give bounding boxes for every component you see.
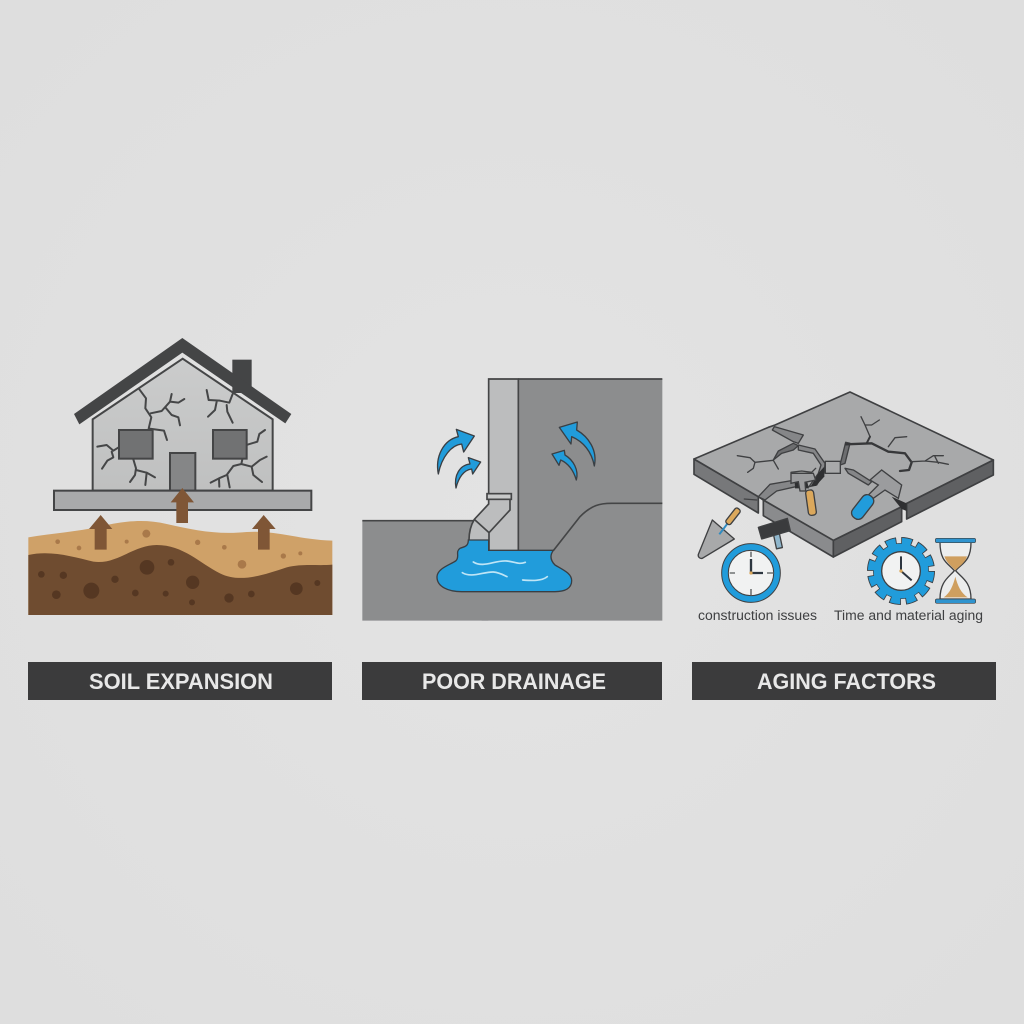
door <box>170 453 195 491</box>
panel: soil expansion <box>28 338 332 615</box>
slab side faces <box>694 459 758 513</box>
house wall <box>93 359 273 491</box>
icon: mallet <box>758 518 790 549</box>
banner: soil expansion <box>28 662 332 700</box>
soil stones <box>38 559 320 605</box>
center block <box>825 461 840 473</box>
window left <box>119 430 153 459</box>
foundation slab <box>54 491 311 510</box>
icon: hourglass <box>935 538 976 603</box>
water pool <box>437 540 572 592</box>
banner: aging factors <box>692 662 996 700</box>
icon: trowel <box>698 507 741 558</box>
slab top <box>694 392 993 540</box>
banner: poor drainage: POOR DRAINAGE <box>422 669 606 694</box>
roof <box>74 338 291 424</box>
curved arrows <box>438 422 595 488</box>
hairline cracks <box>737 417 948 500</box>
banner: poor drainage <box>362 662 662 700</box>
caption: time and material aging: Time and material aging <box>834 608 983 623</box>
ground contour <box>553 503 662 551</box>
chimney <box>232 360 252 393</box>
dark soil layer <box>28 545 332 615</box>
tool: hammer blue handle <box>849 470 902 522</box>
downspout pipe <box>474 379 518 550</box>
panel: aging factors <box>694 392 993 603</box>
banner: aging factors: AGING FACTORS <box>757 669 936 694</box>
arrow right <box>252 515 276 550</box>
icon: clock <box>722 544 780 602</box>
center fissures <box>758 427 872 500</box>
main crack lines <box>846 437 912 471</box>
pipe collar <box>487 494 511 499</box>
light soil layer <box>28 521 332 615</box>
pipe elbow <box>469 499 510 550</box>
arrow left <box>89 515 112 550</box>
banner: soil expansion: SOIL EXPANSION <box>89 669 273 694</box>
panel: poor drainage <box>362 379 662 621</box>
caption: construction issues: construction issues <box>698 608 817 623</box>
wall and ground right <box>482 379 662 621</box>
dark crack shadows <box>795 467 907 511</box>
ground left <box>362 521 488 621</box>
icon: gear clock <box>871 541 931 601</box>
arrow center <box>171 488 194 523</box>
tool: chisel orange handle <box>791 473 817 516</box>
water ripples <box>462 561 547 580</box>
wall cracks <box>97 389 267 487</box>
soil pebbles <box>55 530 302 569</box>
window right <box>213 430 247 459</box>
